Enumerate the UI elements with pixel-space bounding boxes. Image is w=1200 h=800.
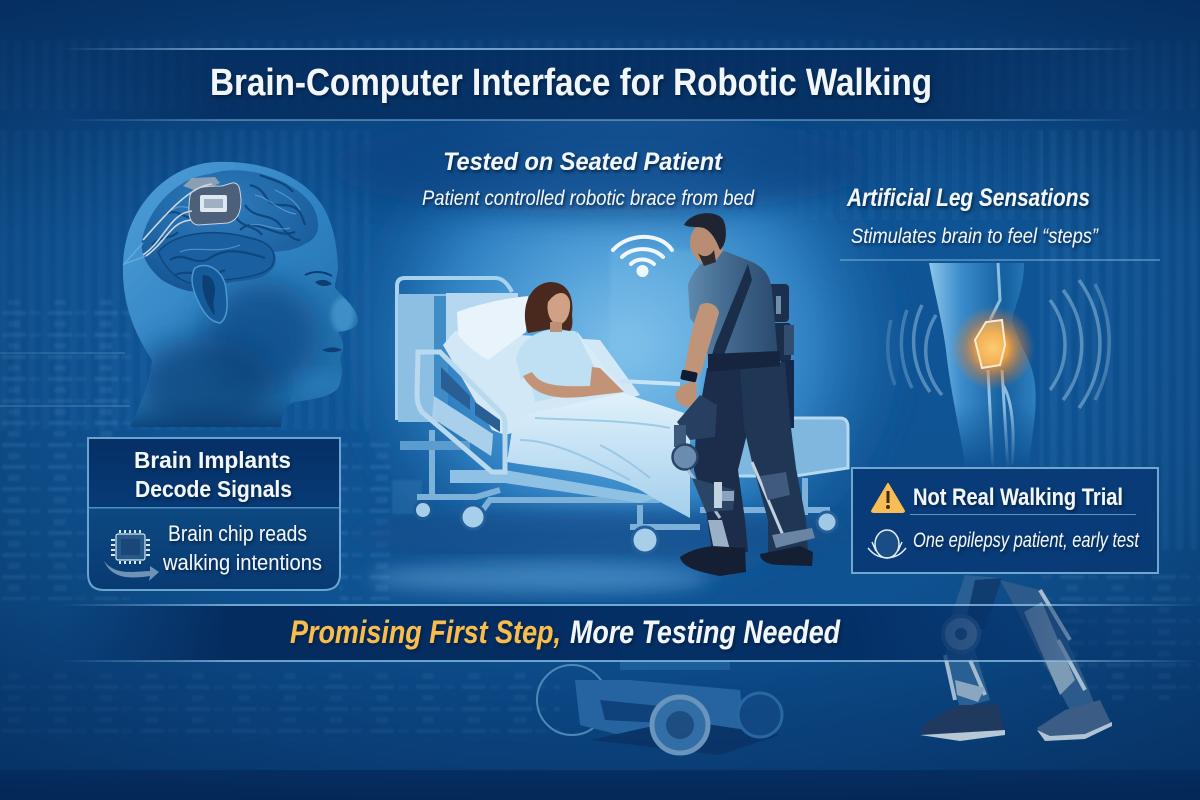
title: Brain-Computer Interface for Robotic Walking — [210, 62, 932, 104]
back pack modules — [768, 284, 794, 428]
hand and watch — [675, 369, 698, 408]
face features — [305, 272, 342, 352]
implant device — [975, 320, 1005, 368]
arm — [684, 303, 719, 376]
front leg — [694, 366, 760, 552]
patient gown — [516, 330, 600, 402]
shirt — [688, 251, 778, 366]
exoskeleton brace — [672, 395, 815, 550]
bed frame and wheels — [400, 430, 837, 553]
icon: microchip with arrow — [104, 530, 159, 581]
panel heading — [134, 447, 292, 502]
head — [684, 213, 726, 266]
patient — [516, 282, 625, 402]
right robotic foot — [1037, 700, 1112, 741]
patient head — [525, 282, 572, 333]
signal arcs — [888, 280, 1109, 408]
title band — [60, 48, 1140, 121]
section heading: artificial leg sensations — [846, 184, 1099, 248]
panel: not real walking trial — [852, 468, 1158, 573]
banner: promising first step — [60, 604, 1200, 662]
head and brain illustration — [123, 162, 358, 433]
brain implant chip — [123, 177, 241, 265]
boots — [680, 546, 813, 576]
rear leg — [740, 362, 808, 556]
section heading: tested on seated patient: Patient controlled robotic brace from bed — [422, 187, 755, 210]
section heading: tested on seated patient — [422, 148, 755, 210]
left robotic leg — [943, 575, 1002, 708]
robotic legs illustration — [920, 575, 1112, 741]
panel description: Brain chip reads — [168, 521, 307, 546]
section heading: tested on seated patient: Tested on Seated Patient — [443, 148, 724, 176]
patient arms — [523, 367, 624, 398]
brain — [142, 170, 318, 292]
mattress — [443, 331, 640, 435]
robotic vehicle illustration — [537, 625, 782, 755]
hospital bed — [397, 278, 848, 553]
pillow — [457, 296, 528, 360]
room backdrop — [330, 80, 915, 610]
panel description: One epilepsy patient, early test — [913, 529, 1140, 552]
banner: promising first step: Promising First Step, — [290, 614, 561, 650]
leg shape — [929, 263, 1036, 470]
glow — [951, 306, 1035, 390]
panel description — [162, 521, 322, 575]
blanket — [507, 393, 690, 518]
panel: brain implants decode signals — [88, 438, 340, 590]
icon: wifi signal — [613, 237, 672, 277]
bed headboard — [397, 278, 518, 422]
icon: warning triangle — [872, 484, 904, 512]
man in exoskeleton — [672, 213, 815, 576]
left robotic foot — [920, 705, 1005, 741]
leg illustration with glowing implant — [888, 263, 1109, 470]
banner: promising first step: More Testing Needed — [570, 614, 841, 650]
section heading: artificial leg sensations: Stimulates brain to feel “steps” — [851, 225, 1099, 248]
icon: head outline — [868, 530, 906, 558]
ear — [192, 265, 227, 323]
section heading: artificial leg sensations: Artificial Leg Sensations — [846, 184, 1090, 212]
side rail — [417, 352, 505, 472]
panel heading: Not Real Walking Trial — [913, 484, 1123, 511]
bed footboard — [735, 418, 848, 476]
panel divider — [910, 514, 1136, 515]
right robotic leg — [1000, 580, 1095, 710]
panel description: walking intentions — [162, 550, 322, 575]
rail behind patient — [620, 381, 680, 384]
panel heading: Brain Implants — [134, 447, 291, 473]
strap and belt — [708, 264, 780, 372]
panel heading: Decode Signals — [135, 476, 292, 502]
divider under leg heading — [840, 259, 1160, 261]
